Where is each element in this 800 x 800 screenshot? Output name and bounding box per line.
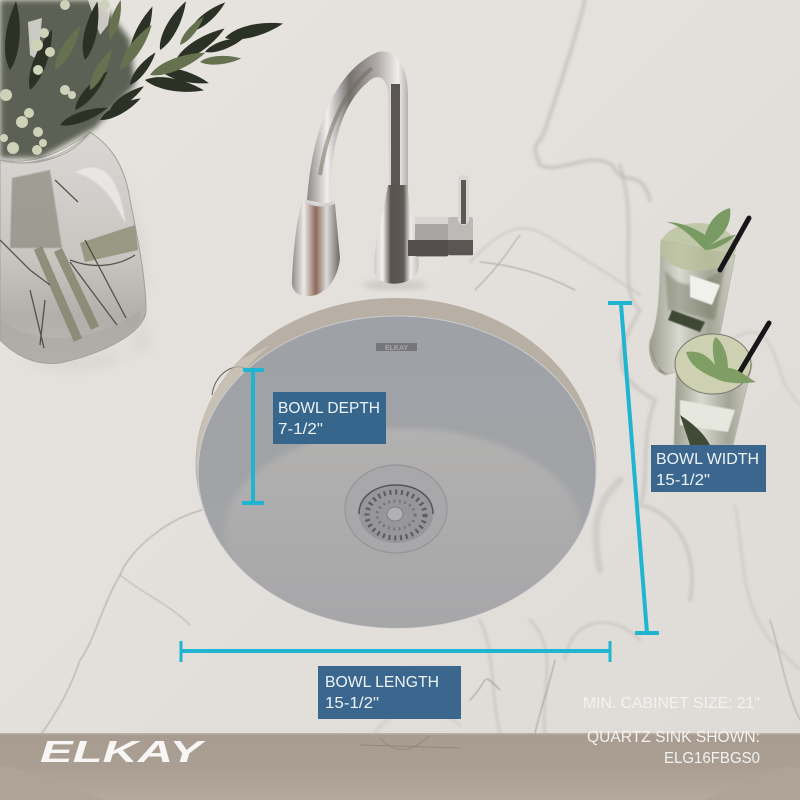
drain	[345, 465, 447, 553]
dimension: bowl depth	[242, 370, 386, 503]
stems and leaves	[0, 0, 284, 158]
bowl width label: 15-1/2"	[656, 472, 710, 489]
faucet shadow	[363, 280, 427, 290]
faucet	[292, 52, 473, 296]
back glass	[649, 208, 749, 376]
bowl floor	[225, 428, 581, 632]
bowl length label	[318, 666, 461, 719]
quartz sink note: QUARTZ SINK SHOWN:	[587, 729, 760, 746]
base band with reflected countertop edge	[0, 733, 800, 800]
brand plate	[376, 343, 417, 352]
teal width arrow	[608, 303, 659, 633]
teal length arrow	[181, 641, 610, 662]
front glass	[674, 323, 769, 445]
dimension: bowl length	[181, 641, 610, 719]
vase with greenery	[0, 0, 284, 370]
bowl width label: BOWL WIDTH	[656, 451, 759, 468]
lever and handle	[408, 175, 473, 257]
faucet body	[374, 185, 419, 284]
bowl depth label: BOWL DEPTH	[278, 400, 380, 417]
quartz sink note	[587, 729, 760, 767]
brand plate: ELKAY	[385, 345, 408, 352]
Elkay logo: ELKAY	[40, 734, 207, 769]
bowl wall	[198, 316, 596, 628]
pull-down spray head	[292, 198, 340, 296]
bowl width label	[651, 445, 766, 492]
drinks	[649, 208, 769, 445]
vase shadow	[20, 170, 150, 370]
quartz sink note: ELG16FBGS0	[664, 750, 760, 767]
bowl length label: BOWL LENGTH	[325, 674, 439, 691]
bowl depth label: 7-1/2"	[278, 421, 323, 438]
beige outer rim	[196, 298, 596, 628]
glass vase	[0, 132, 146, 363]
bowl depth label	[273, 392, 386, 444]
bowl length label: 15-1/2"	[325, 695, 379, 712]
dimension: bowl width	[608, 303, 766, 633]
teal depth arrow	[242, 370, 264, 503]
round sink	[196, 298, 596, 632]
minimum cabinet size note: MIN. CABINET SIZE: 21"	[583, 695, 760, 712]
spout arch	[307, 52, 408, 205]
